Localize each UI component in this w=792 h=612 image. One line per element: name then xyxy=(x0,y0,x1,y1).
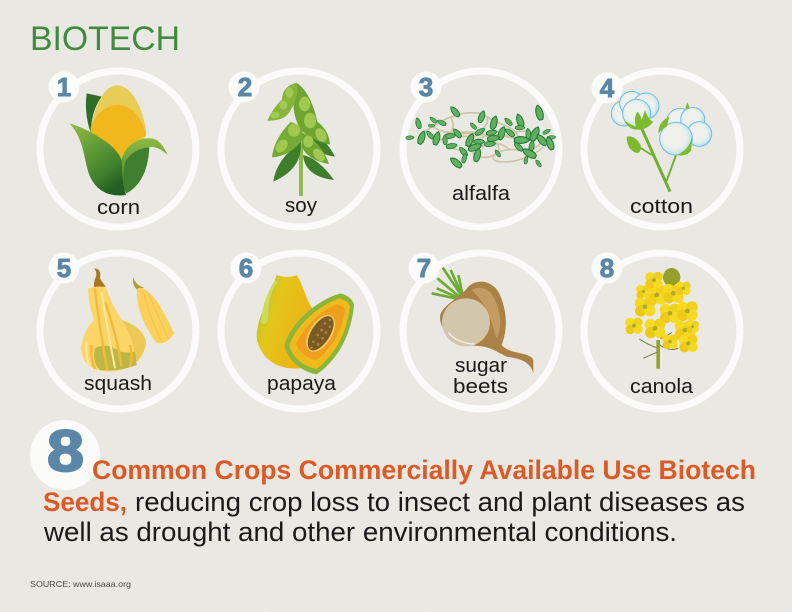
panel: soy xyxy=(221,71,377,227)
label: cotton: cotton xyxy=(630,196,693,218)
title: BIOTECH xyxy=(30,20,180,58)
headline text block xyxy=(43,455,756,547)
icon: papaya xyxy=(257,275,354,374)
label: papaya: papaya xyxy=(267,373,337,395)
panel: canola xyxy=(584,252,740,409)
panel: sugar beets xyxy=(403,252,559,409)
label: sugar: sugar xyxy=(455,355,507,377)
big number badge 8: 8 xyxy=(47,419,84,484)
number badge 3: 3 xyxy=(419,72,433,102)
number badge 1 xyxy=(48,72,80,102)
headline text block: reducing crop loss to insect and plant diseases as xyxy=(135,487,745,517)
label: squash: squash xyxy=(84,373,152,395)
headline text block: well as drought and other environmental conditions. xyxy=(43,517,677,547)
icon: canola xyxy=(625,268,699,369)
headline text block: Seeds, xyxy=(43,487,127,517)
icon: soy plant xyxy=(267,83,335,196)
icon: corn xyxy=(69,85,168,195)
panel: papaya xyxy=(221,252,377,409)
label: corn: corn xyxy=(97,197,140,219)
icon: alfalfa sprouts xyxy=(406,104,556,169)
panel: alfalfa xyxy=(403,71,559,227)
number badge 2 xyxy=(228,72,260,102)
number badge 4 xyxy=(592,72,622,104)
label: alfalfa: alfalfa xyxy=(452,183,511,205)
number badge 7: 7 xyxy=(417,253,431,283)
number badge 5 xyxy=(48,252,80,284)
panel: squash xyxy=(40,252,196,409)
label: soy: soy xyxy=(285,195,317,217)
icon: sugar beet xyxy=(432,268,533,373)
number badge 8: 8 xyxy=(600,253,614,283)
number badge 3 xyxy=(410,72,442,102)
number badge 6 xyxy=(230,252,262,284)
label: beets: beets xyxy=(453,376,508,398)
number badge 8 xyxy=(592,252,622,284)
number badge 1: 1 xyxy=(57,72,71,102)
number badge 2: 2 xyxy=(238,72,252,102)
number badge 6: 6 xyxy=(239,253,253,283)
big number badge 8 xyxy=(30,419,100,490)
panel: corn xyxy=(40,71,196,227)
label: canola: canola xyxy=(630,376,694,398)
icon: cotton xyxy=(611,91,712,192)
headline text block: Common Crops Commercially Available Use Biotech xyxy=(92,455,756,485)
icon: squash xyxy=(81,268,174,372)
number badge 4: 4 xyxy=(600,73,615,103)
number badge 5: 5 xyxy=(57,253,71,283)
number badge 7 xyxy=(408,252,440,284)
panel: cotton xyxy=(584,71,740,227)
source note: SOURCE: www.isaaa.org xyxy=(30,580,131,589)
